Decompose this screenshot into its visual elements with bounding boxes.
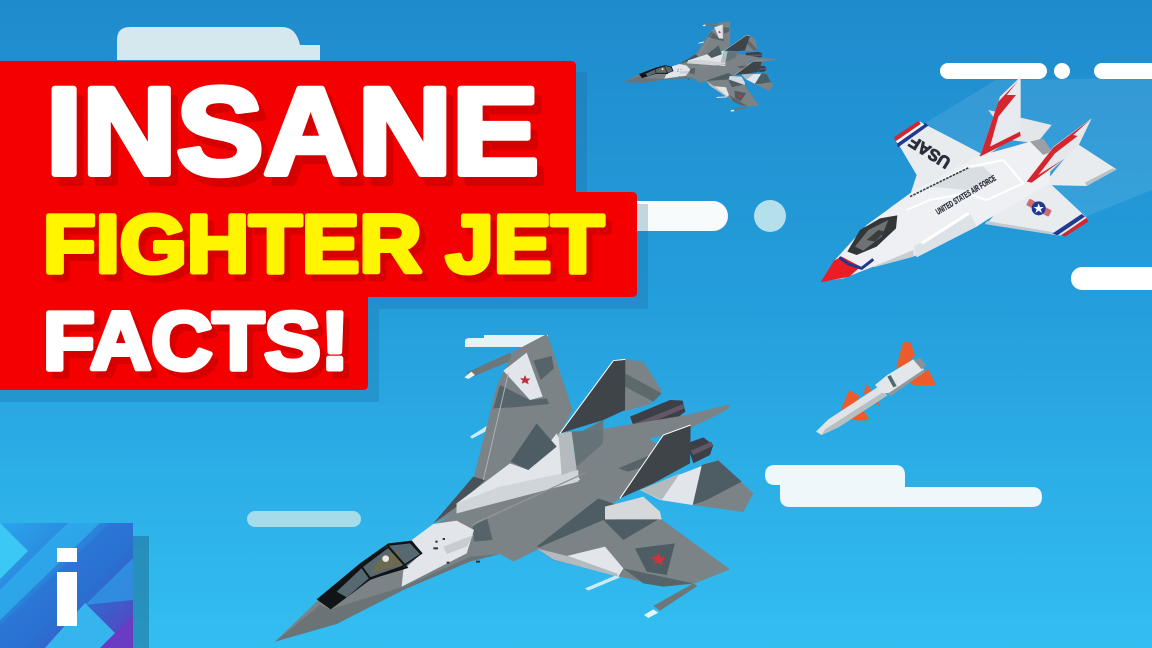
heading: INSANE: INSANE [46, 63, 539, 201]
red nose [821, 257, 861, 282]
forward fuselage white [402, 521, 474, 587]
title panel shadow [0, 72, 648, 402]
upper wing [895, 122, 981, 197]
lower missile [653, 583, 697, 611]
vertical tail left [980, 77, 1021, 157]
dark camo [537, 498, 637, 557]
tail fin grey [623, 359, 662, 412]
horizontal stabiliser [693, 460, 753, 512]
nozzle [1030, 138, 1052, 155]
USAF lettering: USAF [905, 132, 954, 172]
title panel [0, 61, 637, 390]
top missile [467, 353, 514, 377]
jet: grey Su-35 large, bottom [275, 334, 753, 642]
light beam behind white jet [925, 78, 1152, 217]
jet: grey Su-35 small, top [623, 0, 789, 129]
tail fin dark right [620, 425, 691, 498]
heading: FACTS! shadow: FACTS! [49, 303, 355, 394]
panel lines [907, 160, 1023, 210]
dark wing patch over intake [511, 423, 557, 470]
heading: FIGHTER JET: FIGHTER JET [43, 199, 604, 290]
jet: white USAF F-35 Thunderbird [821, 77, 1117, 282]
body [816, 387, 887, 435]
fuselage [822, 142, 1051, 282]
tail boom [597, 404, 731, 447]
fins [896, 342, 915, 368]
white intake panel [457, 433, 580, 513]
roundel [1026, 199, 1052, 217]
lower wing [537, 518, 730, 587]
lower wing [985, 180, 1087, 236]
cockpit [317, 541, 423, 609]
logo shadow [133, 536, 149, 648]
vertical tail right [1027, 118, 1092, 182]
canopy [847, 215, 897, 255]
wing tip stripes [894, 121, 921, 142]
tail fin dark left [560, 359, 625, 433]
fuselage [275, 428, 687, 642]
upper wing [433, 334, 573, 523]
missile [816, 342, 936, 435]
UNITED STATES AIR FORCE lettering: UNITED STATES AIR FORCE [934, 173, 998, 217]
nozzles [630, 400, 685, 434]
logo: infographics i [0, 523, 133, 648]
heading: INSANE shadow: INSANE [53, 72, 546, 210]
panel dots [433, 538, 480, 564]
heading: FIGHTER JET shadow: FIGHTER JET [49, 206, 610, 297]
red star lower [651, 553, 666, 565]
centre line [470, 470, 590, 527]
red star upper [520, 375, 531, 384]
pylon ghost [470, 426, 487, 439]
clouds [117, 27, 1152, 527]
heading: FACTS!: FACTS! [43, 296, 349, 387]
tail planes [988, 110, 1052, 143]
